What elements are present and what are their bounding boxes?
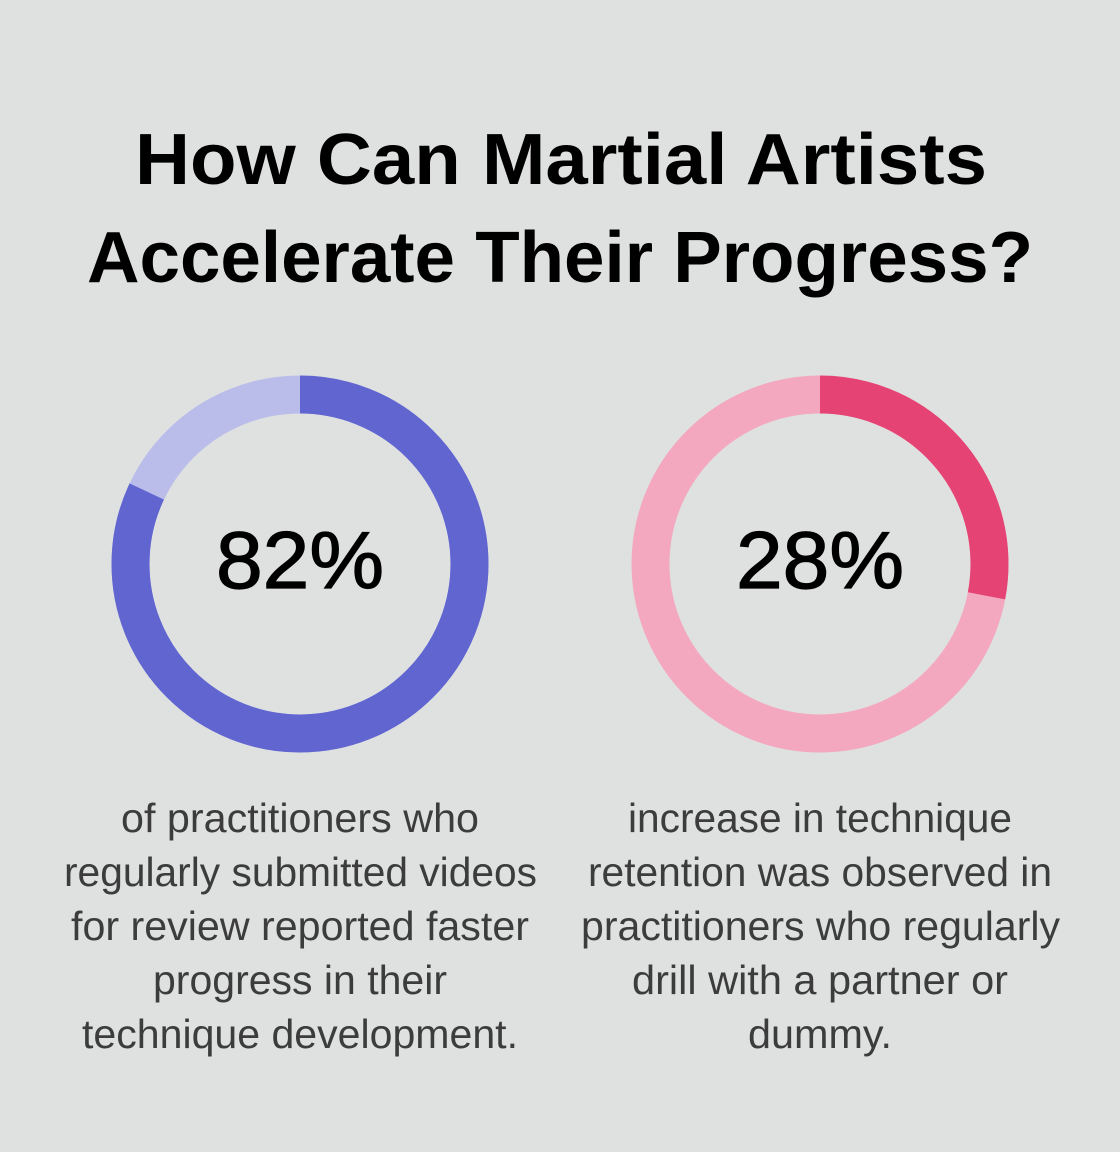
title: Accelerate Their Progress? (87, 218, 1033, 298)
description: 28% statistic (581, 795, 1061, 1057)
description: 28% statistic: drill with a partner or (632, 957, 1008, 1003)
description: 82% statistic: technique development. (82, 1011, 518, 1057)
description: 28% statistic: retention was observed in (588, 849, 1052, 895)
description: 82% statistic: for review reported faster (71, 903, 529, 949)
description: 82% statistic: of practitioners who (121, 795, 479, 841)
donut chart: 28% (650, 394, 990, 734)
title: How Can Martial Artists (135, 120, 987, 200)
description: 28% statistic: dummy. (748, 1011, 892, 1057)
donut chart: 82% (130, 394, 470, 734)
description: 82% statistic: regularly submitted videos (64, 849, 537, 895)
title (87, 120, 1033, 298)
value: 82%: 82% (216, 516, 384, 606)
value: 28%: 28% (736, 516, 904, 606)
panel: 82% statistic (64, 394, 537, 1057)
description: 28% statistic: practitioners who regularly (581, 903, 1061, 949)
description: 28% statistic: increase in technique (628, 795, 1012, 841)
description: 82% statistic: progress in their (153, 957, 447, 1003)
description: 82% statistic (64, 795, 537, 1057)
panel: 28% statistic (581, 394, 1061, 1057)
